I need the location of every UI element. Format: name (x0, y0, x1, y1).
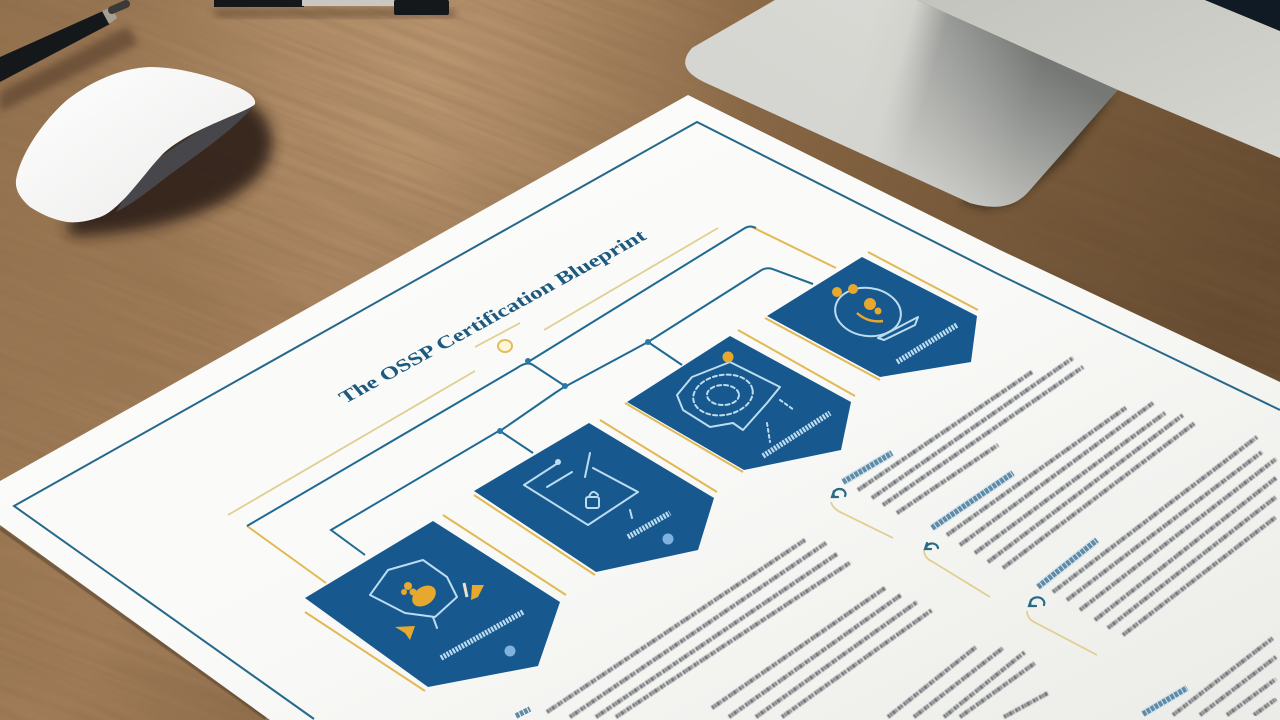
card 1 label (441, 612, 523, 658)
card 4 label (897, 325, 957, 362)
card 1 dot (504, 646, 516, 656)
card 3 label (763, 413, 830, 456)
card 2 dot (662, 534, 674, 544)
section 1: heading, icon, text (831, 358, 1083, 538)
process connector lines (247, 226, 836, 583)
title ornament (475, 323, 520, 352)
section 3: heading, icon, text (1027, 437, 1276, 655)
card 3: network step (625, 330, 855, 472)
icon: cloud network cluster (677, 352, 794, 442)
icon: white mouse (16, 67, 273, 236)
card 2 label (628, 513, 670, 537)
icon: shield with gold objects (370, 560, 484, 640)
icon: document frame with lock (524, 453, 638, 525)
title: The OSSP Certification Blueprint (334, 225, 651, 407)
text block: lower column C (888, 647, 1048, 717)
text block: lower column A (547, 540, 851, 717)
card 1: shield step (305, 515, 566, 691)
icon: black pen top left (0, 4, 138, 112)
section 2: heading, icon, text (924, 403, 1195, 597)
monitor stand and chin (685, 0, 1280, 210)
text block: lower column B (712, 588, 932, 717)
gold header rules (228, 228, 718, 515)
heading: lower column stub (516, 709, 530, 716)
icon: marker pen top (214, 0, 455, 17)
icon: globe on stand (832, 284, 918, 340)
card 4: insight step (765, 252, 978, 380)
section 4: heading and text (1143, 638, 1276, 715)
card 2: document step (474, 420, 717, 575)
